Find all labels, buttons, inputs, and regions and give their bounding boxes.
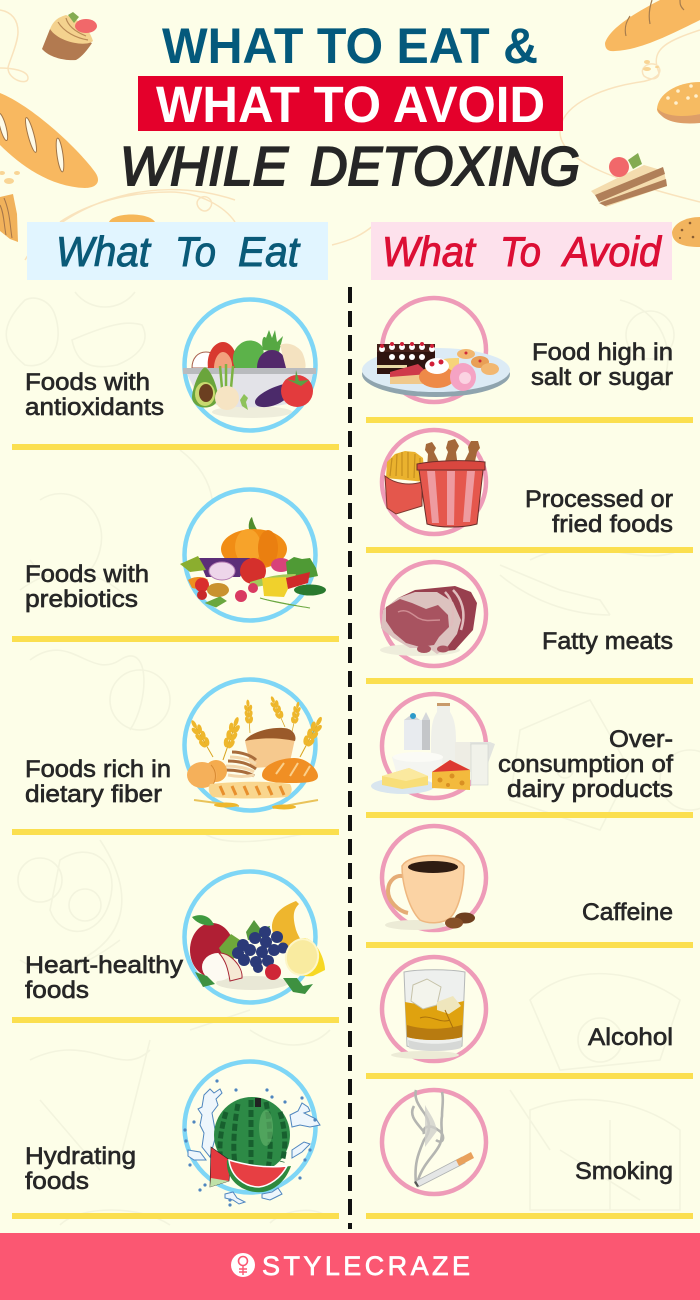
item: processed or fried foods: fried foods (552, 511, 673, 538)
item: fatty meats: Fatty meats (542, 628, 673, 655)
item: food high in salt or sugar (362, 298, 693, 423)
brand name: STYLECRAZE (262, 1251, 470, 1281)
item: heart-healthy foods (12, 872, 339, 1023)
icon: watermelon splash (183, 1079, 320, 1207)
heading: what to eat: To (175, 228, 216, 275)
heading: what to eat: What (56, 228, 152, 275)
icon: fruits (190, 901, 325, 994)
dashed divider (348, 287, 352, 1229)
icon: coffee cup and beans (388, 856, 475, 928)
heading: what to eat: Eat (238, 228, 301, 275)
icon: cigarette and smoke (412, 1090, 474, 1187)
item: food high in salt or sugar: Food high in (532, 339, 673, 366)
cupcake (42, 12, 97, 60)
top right baguette (605, 0, 700, 51)
item: foods with antioxidants: antioxidants (25, 394, 164, 421)
item: foods with prebiotics: prebiotics (25, 586, 138, 613)
item: foods with antioxidants (12, 300, 339, 450)
crumbs (643, 60, 659, 71)
panel: what to eat (12, 300, 339, 1219)
item: smoking (366, 1090, 693, 1219)
cake slice (591, 153, 667, 207)
left loaf (0, 194, 18, 242)
item: alcohol (366, 957, 693, 1079)
heading: what to avoid: Avoid (560, 228, 663, 275)
heading: what to avoid: What (382, 228, 477, 275)
item: food high in salt or sugar: salt or sugar (531, 364, 673, 391)
item: foods with antioxidants: Foods with (25, 369, 150, 396)
heading: what to avoid (371, 222, 672, 280)
icon: vegetable pile (180, 517, 326, 608)
bun (657, 82, 700, 123)
footer band (0, 1233, 700, 1300)
heading: what to avoid: To (500, 228, 541, 275)
item: foods with prebiotics: Foods with (25, 561, 149, 588)
icon: vegetable bowl (183, 330, 316, 410)
heading: what to eat (27, 222, 328, 280)
icon: plate of sweets (362, 342, 510, 397)
item: smoking: Smoking (575, 1158, 673, 1185)
item: over-consumption of dairy products: Over- (609, 726, 673, 753)
item: foods with prebiotics (12, 490, 339, 642)
decorative food illustrations (0, 0, 700, 260)
item: hydrating foods: Hydrating (25, 1143, 136, 1170)
item: heart-healthy foods: Heart-healthy (25, 952, 183, 979)
half bun behind header (109, 214, 155, 222)
item: caffeine: Caffeine (582, 899, 673, 926)
item: processed or fried foods: Processed or (525, 486, 673, 513)
item: caffeine (366, 826, 693, 948)
item: over-consumption of dairy products (366, 694, 693, 818)
title (120, 18, 580, 197)
icon: stylecraze logo (231, 1253, 255, 1277)
icon: dairy products (371, 703, 495, 794)
item: processed or fried foods (366, 430, 693, 553)
item: fatty meats (366, 562, 693, 684)
title line 3: WHILE (120, 135, 289, 197)
icon: fries and fried chicken bucket (385, 439, 485, 527)
icon: cut of meat (381, 586, 477, 654)
item: heart-healthy foods: foods (25, 977, 89, 1004)
icon: breads and wheat (187, 694, 327, 810)
title line 3 (120, 135, 580, 197)
item: foods rich in dietary fiber: Foods rich in (25, 756, 171, 783)
title line 3: DETOXING (310, 135, 580, 197)
icon: whisky glass (404, 970, 465, 1051)
item: hydrating foods (12, 1062, 339, 1219)
title line 2 on red band: WHAT TO AVOID (156, 76, 545, 133)
item: over-consumption of dairy products: dairy products (507, 776, 673, 803)
item: foods rich in dietary fiber: dietary fiber (25, 781, 162, 808)
item: over-consumption of dairy products: consumption of (498, 751, 673, 778)
item: foods rich in dietary fiber (12, 680, 339, 835)
item: alcohol: Alcohol (588, 1024, 673, 1051)
item: hydrating foods: foods (25, 1168, 89, 1195)
panel: what to avoid (362, 298, 693, 1219)
title line 1: WHAT TO EAT & (162, 18, 538, 74)
right cookie (672, 217, 700, 247)
left baguette (0, 93, 98, 188)
